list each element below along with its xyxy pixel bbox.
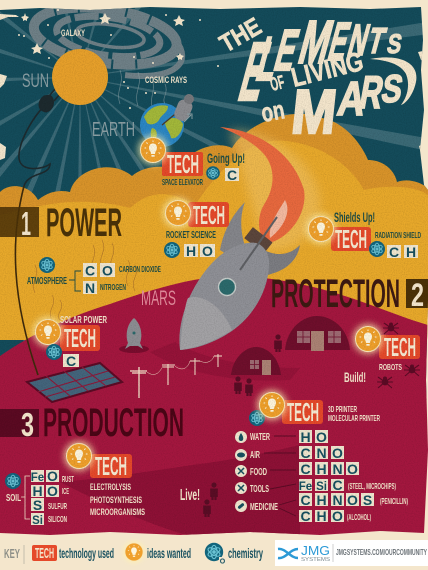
tech: 3d printer: 3D PRINTER: [328, 404, 357, 414]
small rocket: [119, 318, 149, 353]
key: chemistry: O: [220, 558, 226, 566]
torn paper flecks on left edge: [0, 14, 428, 160]
soil chemistry: H: [32, 483, 43, 499]
title word: elements: T: [364, 21, 390, 61]
tech: production: PHOTOSYNTHESIS: [90, 495, 142, 506]
atmosphere chemistry: C: [85, 262, 95, 278]
title word: mars: M: [289, 78, 340, 147]
medicine tiles: alcohol: (ALCOHOL): [347, 512, 371, 522]
food tiles: C: [300, 461, 311, 477]
tech: rocket science: TECH: [193, 200, 225, 230]
tech: radiation shield: Shields Up!: [334, 209, 375, 225]
cord with plug: [15, 88, 60, 375]
air tiles: C: [300, 445, 311, 461]
label: live: Live!: [180, 487, 200, 504]
resource labels: WATER: [250, 432, 270, 443]
tech: space elevator: [138, 135, 245, 187]
sponsor logo panel: SYSTEMS: [301, 557, 330, 563]
tech: radiation shield: C: [389, 244, 399, 260]
air tiles: [299, 445, 344, 461]
label: sun: SUN: [22, 71, 49, 92]
tech: radiation shield: [306, 209, 421, 260]
title word: on: on: [259, 94, 287, 128]
medicine tiles: alcohol: H: [316, 508, 327, 524]
title word: elements: E: [323, 11, 356, 72]
atmosphere chemistry: NITROGEN: [100, 282, 126, 292]
tech: solar power: SOLAR POWER: [60, 315, 107, 326]
label: cosmic rays: COSMIC RAYS: [145, 75, 187, 86]
tools tiles: [299, 477, 396, 493]
tech: robots: ROBOTS: [379, 362, 402, 372]
rocket centre fin: [240, 217, 277, 270]
title word: mars: S: [378, 67, 406, 111]
label: earth: EARTH: [92, 119, 135, 141]
robot spiders: [377, 322, 420, 388]
medicine tiles: penicillin: C: [300, 492, 311, 508]
label: galaxy: GALAXY: [61, 28, 85, 38]
tech: rocket science: H: [186, 243, 196, 259]
food tiles: N: [332, 461, 343, 477]
yellow ground: [0, 141, 428, 340]
section heading: production: [0, 401, 184, 445]
soil chemistry: Si: [32, 515, 43, 527]
key: chemistry: chemistry: [228, 545, 263, 561]
section heading: power: [0, 201, 122, 245]
title swoosh: [370, 57, 416, 105]
title word: elements: E: [231, 25, 278, 118]
rocket top fin: [220, 202, 245, 258]
medicine tiles: alcohol: C: [300, 508, 311, 524]
solar panel: [27, 363, 122, 402]
medicine tiles: penicillin: H: [316, 492, 327, 508]
title word: elements: L: [250, 25, 287, 94]
medicine tiles: alcohol: [299, 508, 371, 524]
rocket nozzle: [244, 227, 273, 254]
tech: rocket science: O: [202, 243, 213, 259]
cosmic ray wiggles: [118, 70, 166, 106]
tech: solar power: [33, 315, 107, 369]
soil chemistry: S: [33, 497, 42, 513]
title word: elements: [237, 20, 402, 102]
tech: robots: [353, 324, 420, 372]
title word: living: LIVING: [288, 46, 366, 93]
tech: solar power: TECH: [64, 323, 96, 353]
sun rays: [0, 8, 422, 342]
medicine tiles: penicillin: S: [363, 492, 372, 508]
tech: rocket science: ROCKET SCIENCE: [166, 230, 216, 241]
rocket nose cone: [180, 297, 232, 350]
section heading: power: POWER: [46, 201, 122, 245]
soil chemistry: SULFUR: [48, 501, 67, 511]
shaded ground wedge: [60, 445, 300, 536]
galaxy: [28, 8, 186, 79]
water tiles: O: [316, 429, 327, 445]
soil chemistry: RUST: [62, 474, 74, 484]
resource labels: FOOD: [250, 467, 267, 478]
tech: solar power: C: [66, 353, 76, 369]
rocket: [179, 202, 300, 350]
section heading: production: 3: [21, 406, 34, 443]
tech: space elevator: TECH: [167, 149, 199, 179]
atmosphere chemistry: [27, 257, 161, 296]
medicine tiles: penicillin: [299, 492, 408, 508]
rocket shadow trail: [150, 342, 300, 381]
small dome habitat: [231, 347, 281, 375]
water tiles: [299, 429, 328, 445]
atmosphere chemistry: O: [102, 262, 113, 278]
people: [203, 334, 282, 517]
section heading: production: PRODUCTION: [43, 401, 184, 445]
title word: of: OF: [268, 72, 287, 96]
tech: production: MICROORGANISMS: [90, 507, 145, 518]
title word: mars: A: [334, 72, 369, 126]
soil chemistry: O: [47, 483, 58, 499]
food tiles: O: [347, 461, 358, 477]
tech: production: [64, 441, 145, 518]
key: technology used: [32, 545, 114, 562]
key: ideas wanted: [123, 541, 191, 563]
title word: elements: M: [292, 9, 339, 77]
label: build: Build!: [344, 369, 366, 385]
soil chemistry: [5, 468, 74, 527]
resource arrows: [264, 436, 296, 516]
tech: radiation shield: TECH: [335, 224, 367, 254]
rocket body: [179, 243, 269, 350]
food tiles: [299, 461, 359, 477]
tools tiles: C: [332, 477, 343, 493]
sponsor logo panel: JMG: [301, 543, 330, 558]
medicine tiles: alcohol: O: [332, 508, 343, 524]
title: [217, 16, 416, 134]
section heading: power: 1: [21, 205, 31, 242]
tech: space elevator: Going Up!: [207, 150, 245, 166]
food tiles: H: [316, 461, 327, 477]
tech: rocket science: [163, 198, 229, 259]
tools tiles: Fe: [299, 481, 312, 493]
earth: [140, 103, 184, 147]
title word: elements: S: [385, 28, 404, 59]
rocket right fin: [266, 245, 300, 275]
tech: space elevator: SPACE ELEVATOR: [162, 177, 203, 187]
atmosphere chemistry: ATMOSPHERE: [27, 276, 67, 287]
icon: space elevator capsule: [172, 94, 194, 123]
orange cloud layer: [0, 114, 428, 340]
sun: [52, 49, 108, 105]
large dome habitat: [285, 316, 350, 351]
key: ideas wanted: ideas wanted: [147, 545, 191, 561]
tools tiles: Si: [316, 481, 327, 493]
soil chemistry: ICE: [62, 486, 69, 496]
air tiles: O: [332, 445, 343, 461]
title word: mars: R: [356, 66, 387, 118]
medicine tiles: penicillin: O: [347, 492, 358, 508]
title word: the: THE: [215, 12, 266, 58]
title word: elements: E: [269, 18, 305, 83]
atmosphere chemistry: CARBON DIOXIDE: [119, 264, 161, 274]
soil chemistry: SILICON: [48, 514, 67, 524]
tech: production: TECH: [95, 451, 127, 481]
red ground: [0, 276, 428, 540]
resource icons: [235, 431, 247, 512]
flame: [220, 127, 304, 243]
label: mars: MARS: [141, 287, 176, 310]
tech: 3d printer: [249, 390, 380, 427]
flame glow: [230, 130, 320, 251]
resource list: [235, 429, 408, 524]
resource labels: TOOLS: [250, 484, 269, 495]
title word: mars: [292, 74, 402, 134]
resource labels: [250, 432, 278, 513]
medicine tiles: penicillin: N: [332, 492, 343, 508]
key strip: technology used: [59, 545, 114, 561]
key label: KEY: [4, 546, 20, 561]
rocket window: [218, 278, 236, 296]
title word: elements: N: [343, 16, 375, 65]
stars: [18, 9, 219, 109]
heat wiggles: [33, 240, 137, 321]
air tiles: N: [316, 445, 327, 461]
tech: production: ELECTROLYSIS: [90, 482, 131, 493]
water tiles: H: [300, 429, 311, 445]
key: chemistry: [205, 543, 263, 566]
power poles: [130, 354, 222, 398]
soil chemistry: SOIL: [6, 493, 21, 504]
tech: space elevator: C: [227, 167, 237, 183]
key: technology used: TECH: [35, 545, 54, 562]
resource labels: AIR: [250, 450, 260, 461]
soil chemistry: O: [47, 468, 58, 484]
sponsor logo panel: [275, 540, 428, 566]
tech: 3d printer: MOLECULAR PRINTER: [328, 413, 380, 423]
atmosphere chemistry: N: [85, 280, 95, 296]
soil chemistry: Fe: [31, 472, 44, 484]
tech: 3d printer: TECH: [287, 397, 319, 427]
resource labels: MEDICINE: [250, 502, 278, 513]
night sky: [0, 0, 428, 400]
tech: radiation shield: H: [406, 244, 416, 260]
key strip: [4, 540, 428, 566]
